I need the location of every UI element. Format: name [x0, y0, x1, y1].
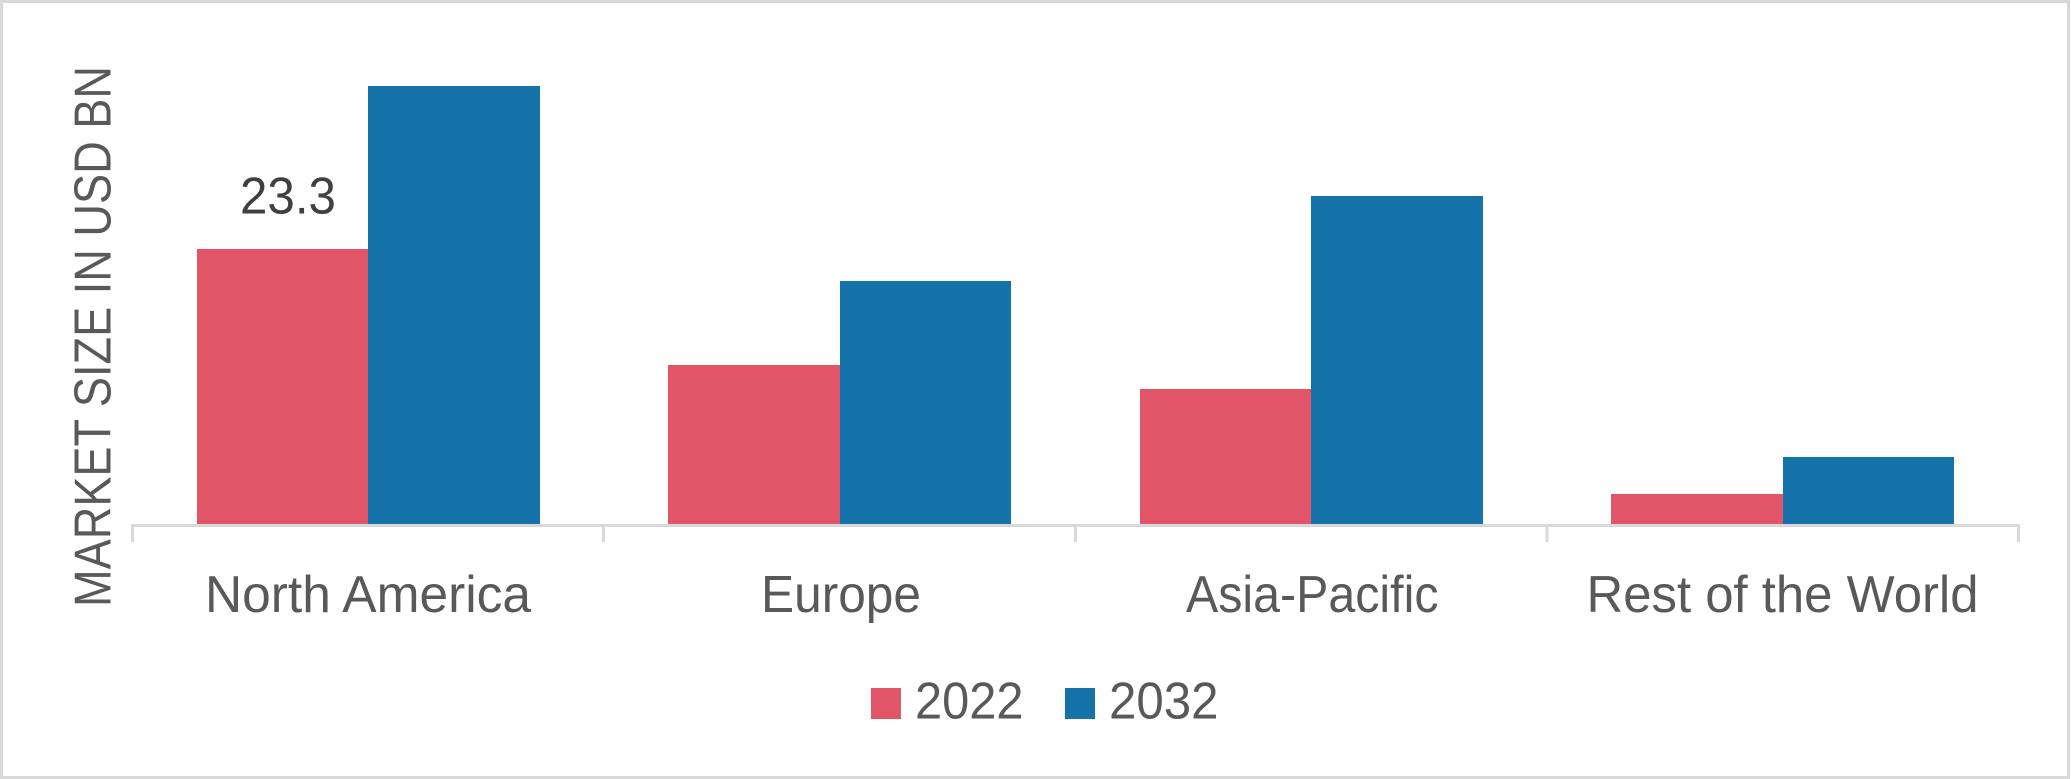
data label: 23.3: 23.3	[240, 168, 336, 226]
category label: Europe: Europe	[761, 566, 921, 624]
bars: Asia-Pacific	[1140, 196, 1483, 524]
bars: Rest of the World	[1611, 457, 1954, 524]
x axis line and ticks	[132, 526, 2018, 542]
category label: Rest of the World: Rest of the World	[1586, 566, 1978, 624]
legend swatch: 2022	[871, 688, 901, 719]
category label: North America: North America	[205, 566, 531, 624]
legend	[871, 672, 1218, 730]
category label: Asia-Pacific: Asia-Pacific	[1186, 566, 1438, 624]
legend label: 2032: 2032	[1109, 672, 1218, 730]
bars: North America	[197, 86, 540, 524]
legend label: 2022: 2022	[915, 672, 1024, 730]
legend swatch: 2032	[1065, 688, 1095, 719]
bars: Europe	[668, 281, 1011, 524]
y axis title: MARKET SIZE IN USD BN	[64, 66, 122, 607]
bar chart	[132, 86, 2018, 624]
